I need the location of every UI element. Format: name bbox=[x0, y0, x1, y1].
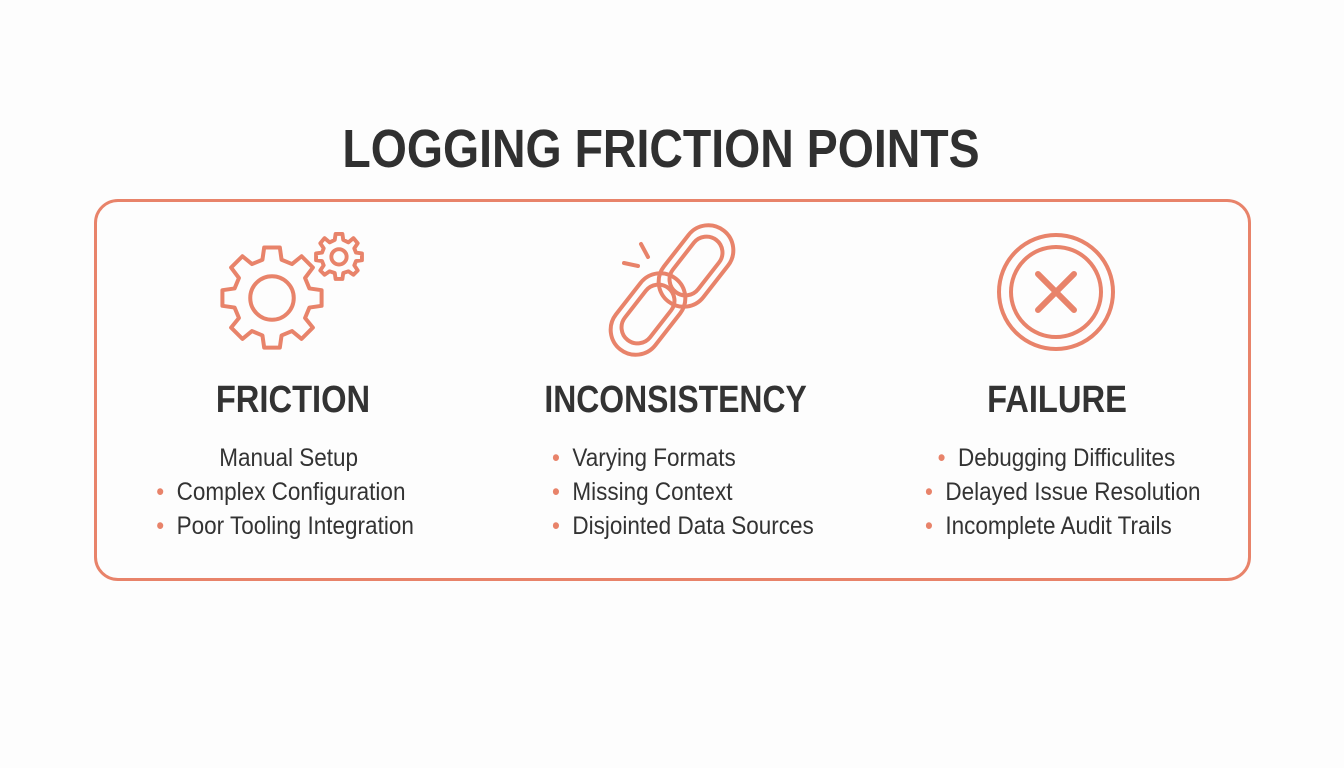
heading: friction: FRICTION bbox=[216, 379, 370, 421]
panel frame bbox=[94, 199, 1251, 581]
heading: inconsistency: INCONSISTENCY bbox=[544, 379, 807, 421]
list: inconsistency: • Missing Context bbox=[552, 478, 732, 506]
list: friction: • Poor Tooling Integration bbox=[156, 512, 414, 540]
icon: broken chain bbox=[601, 215, 743, 365]
title: LOGGING FRICTION POINTS bbox=[342, 119, 980, 179]
list: friction bbox=[156, 444, 414, 540]
list: inconsistency bbox=[552, 444, 814, 540]
list: inconsistency: • Disjointed Data Sources bbox=[552, 512, 814, 540]
list: inconsistency: • Varying Formats bbox=[552, 444, 736, 472]
list: friction: Manual Setup bbox=[219, 444, 358, 472]
column: friction bbox=[156, 379, 414, 540]
list: failure: • Delayed Issue Resolution bbox=[925, 478, 1201, 506]
list: failure bbox=[925, 444, 1201, 540]
heading: failure: FAILURE bbox=[987, 379, 1127, 421]
column: inconsistency bbox=[544, 379, 814, 540]
icon: failure x circle bbox=[999, 235, 1113, 349]
icon: gears bbox=[222, 234, 362, 348]
list: failure: • Incomplete Audit Trails bbox=[925, 512, 1172, 540]
column: failure bbox=[925, 379, 1201, 540]
list: failure: • Debugging Difficulites bbox=[938, 444, 1175, 472]
list: friction: • Complex Configuration bbox=[156, 478, 405, 506]
